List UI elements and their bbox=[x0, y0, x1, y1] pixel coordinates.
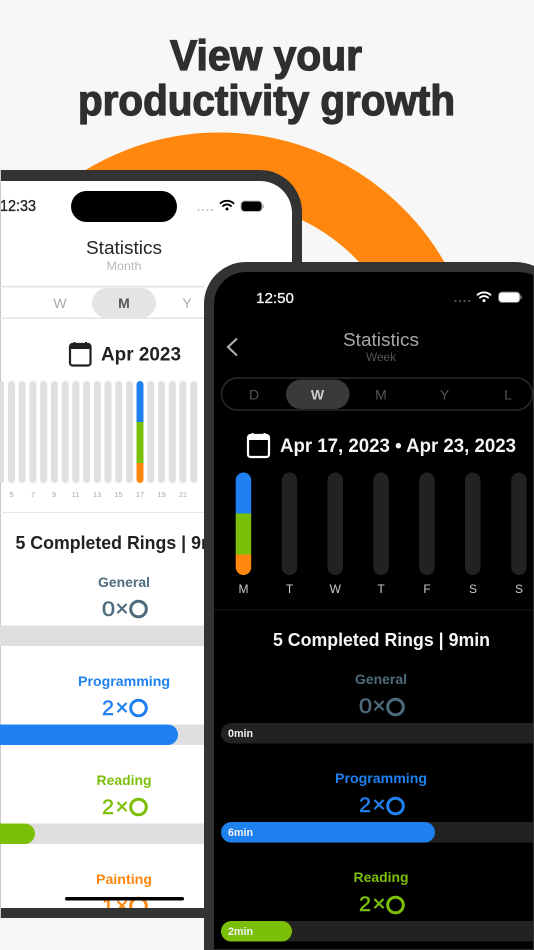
week bar chart: F bbox=[423, 582, 431, 596]
category: general: General bbox=[98, 574, 150, 590]
month bar chart: 15 bbox=[114, 490, 123, 499]
status bar: 12:50 bbox=[256, 290, 294, 307]
category: general bbox=[221, 671, 534, 744]
week bar chart: T bbox=[286, 582, 294, 596]
phone: dark mode bbox=[204, 262, 534, 950]
header bbox=[86, 240, 162, 270]
category: general: × bbox=[372, 693, 386, 718]
week bar chart: S bbox=[515, 582, 523, 596]
month bar chart: 11 bbox=[72, 490, 79, 499]
week bar chart: T bbox=[377, 582, 385, 596]
period selector: W bbox=[311, 386, 325, 402]
category: painting bbox=[96, 874, 152, 908]
category: programming: Programming bbox=[78, 673, 170, 689]
period selector: Y bbox=[440, 386, 450, 402]
week bar chart: M bbox=[238, 582, 248, 596]
summary heading: 5 Completed Rings | 9min bbox=[273, 630, 490, 650]
home indicator bbox=[65, 897, 184, 900]
status bar bbox=[256, 292, 522, 304]
week bar chart: W bbox=[330, 582, 342, 596]
category: general: × bbox=[116, 596, 128, 621]
category: programming bbox=[0, 673, 204, 745]
date heading: Apr 2023 bbox=[101, 344, 181, 366]
category: reading bbox=[221, 869, 534, 942]
status bar: 12:33 bbox=[0, 198, 36, 215]
period selector bbox=[222, 378, 532, 410]
period selector: Y bbox=[182, 295, 192, 311]
date heading bbox=[70, 342, 181, 366]
category: reading: 2 bbox=[102, 796, 114, 819]
category: painting: 1 bbox=[102, 895, 114, 918]
category: general: 0 bbox=[359, 695, 372, 718]
icon: back chevron bbox=[228, 338, 237, 356]
month bar chart: 7 bbox=[31, 490, 35, 499]
header: Statistics bbox=[86, 238, 162, 258]
category: reading: × bbox=[372, 891, 386, 916]
category: programming: 2 bbox=[102, 697, 114, 720]
period selector: D bbox=[249, 386, 259, 402]
category: programming: 2 bbox=[359, 794, 371, 817]
month bar chart: 9 bbox=[52, 490, 56, 499]
week bar chart bbox=[236, 472, 527, 596]
title bbox=[78, 32, 455, 125]
category: reading bbox=[0, 772, 204, 844]
period selector: W bbox=[53, 295, 67, 311]
category: programming bbox=[221, 770, 534, 842]
category: programming: Programming bbox=[335, 770, 427, 786]
week bar chart: S bbox=[469, 582, 477, 596]
phone: light mode bbox=[0, 170, 302, 918]
category: general: 0 bbox=[102, 598, 115, 621]
category: reading: 2 bbox=[359, 893, 371, 916]
month bar chart: 5 bbox=[9, 490, 14, 499]
category: painting: × bbox=[116, 893, 128, 918]
month bar chart bbox=[0, 381, 197, 499]
orange ring arc bbox=[64, 167, 425, 300]
category: reading: Reading bbox=[96, 772, 152, 788]
status bar bbox=[0, 191, 264, 222]
category: general: General bbox=[355, 671, 407, 687]
period selector: M bbox=[375, 386, 387, 402]
month bar chart: 13 bbox=[93, 490, 101, 499]
month bar chart: 19 bbox=[157, 490, 166, 499]
month bar chart: 17 bbox=[136, 490, 144, 499]
category: painting: Painting bbox=[96, 871, 152, 887]
category: reading: × bbox=[116, 794, 128, 819]
category: programming: × bbox=[372, 792, 386, 817]
period selector: L bbox=[504, 386, 512, 402]
date heading: Apr 17, 2023 • Apr 23, 2023 bbox=[280, 435, 516, 457]
period selector bbox=[0, 286, 204, 319]
title: View your bbox=[170, 32, 362, 80]
header bbox=[344, 332, 418, 361]
category: general bbox=[0, 574, 204, 646]
month bar chart: 21 bbox=[179, 490, 187, 499]
summary heading: 5 Completed Rings | 9min bbox=[16, 533, 232, 553]
period selector: M bbox=[118, 295, 130, 311]
category: programming: 6min bbox=[228, 827, 253, 839]
category: programming: × bbox=[116, 695, 128, 720]
header: Week bbox=[366, 350, 397, 364]
category: reading: 2min bbox=[228, 926, 253, 938]
header: Statistics bbox=[343, 330, 419, 350]
title: productivity growth bbox=[78, 77, 455, 125]
header: Month bbox=[106, 259, 142, 273]
category: reading: Reading bbox=[354, 869, 408, 885]
category: general: 0min bbox=[228, 728, 253, 740]
